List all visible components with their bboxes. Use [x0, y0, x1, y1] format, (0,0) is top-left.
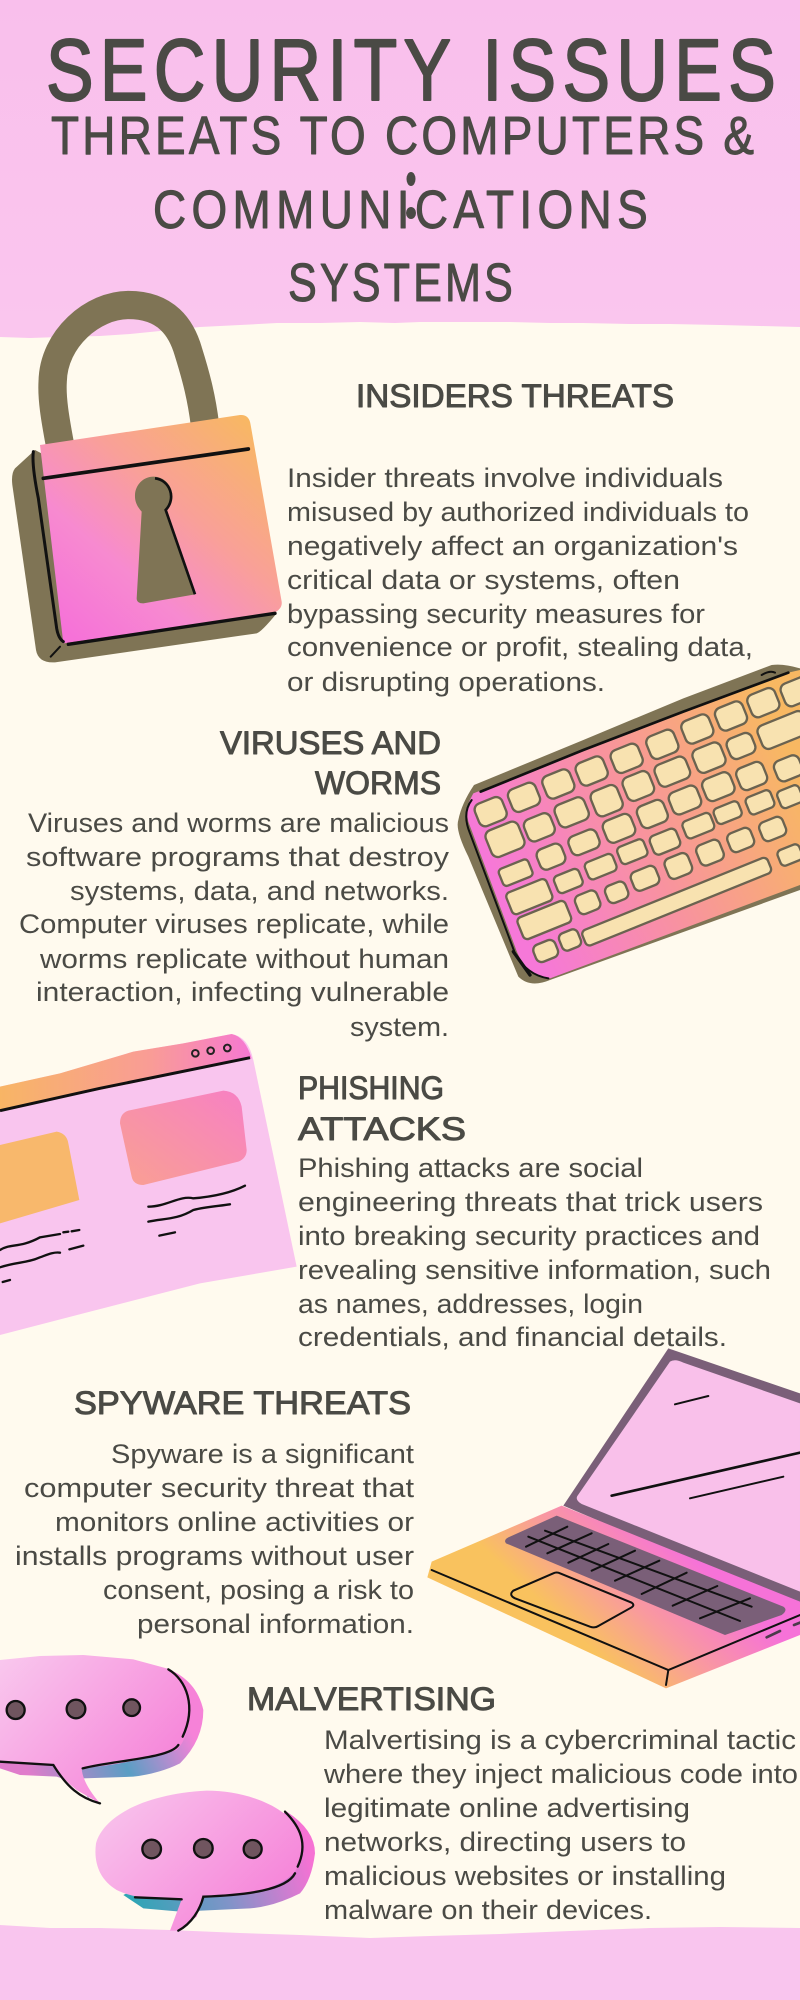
body text: revealing sensitive information, such — [298, 1255, 771, 1285]
body text: negatively affect an organization's — [287, 531, 738, 561]
heading: INSIDERS THREATS — [356, 378, 674, 414]
body text: Phishing attacks are social — [298, 1153, 643, 1183]
body text: Insider threats involve individuals — [287, 463, 723, 493]
body text: convenience or profit, stealing data, — [287, 632, 753, 662]
heading: SPYWARE THREATS — [74, 1385, 411, 1421]
body text: or disrupting operations. — [287, 667, 605, 697]
keyboard back — [458, 665, 800, 983]
section: spyware threats — [15, 1385, 415, 1639]
body text: consent, posing a risk to — [103, 1575, 414, 1605]
subtitle line 3: SYSTEMS — [288, 254, 513, 313]
title bar line — [0, 1058, 250, 1111]
icon: laptop — [427, 1348, 800, 1688]
body text: networks, directing users to — [324, 1827, 686, 1857]
bubble face — [95, 1791, 301, 1931]
text squiggles — [0, 1186, 245, 1282]
body text: installs programs without user — [15, 1541, 414, 1571]
base outline — [432, 1570, 800, 1685]
body text — [298, 1153, 771, 1352]
body text — [287, 463, 753, 697]
padlock back — [12, 450, 277, 662]
body text: computer security threat that — [24, 1473, 415, 1503]
icon: padlock — [12, 305, 282, 662]
padlock shackle — [52, 305, 205, 445]
keyboard outlines — [466, 672, 788, 978]
body text: credentials, and financial details. — [298, 1322, 727, 1352]
bubble face — [0, 1655, 190, 1803]
heading: MALVERTISING — [247, 1681, 496, 1717]
title: security issues: SECURITY ISSUES — [46, 21, 776, 119]
screen glare lines — [612, 1396, 800, 1498]
bubble dots — [142, 1839, 262, 1858]
icon: speech bubble bottom — [95, 1791, 315, 1931]
stray decorative dots — [406, 172, 416, 219]
keys — [473, 675, 800, 964]
body text: interaction, infecting vulnerable — [36, 977, 449, 1007]
body text — [323, 1725, 798, 1925]
bubble outline — [135, 1812, 302, 1931]
heading — [298, 1070, 466, 1147]
laptop screen frame — [563, 1348, 800, 1607]
body text: misused by authorized individuals to — [287, 497, 749, 527]
body text — [19, 808, 450, 1042]
bubble dots — [7, 1699, 140, 1719]
body text: bypassing security measures for — [287, 599, 705, 629]
body text: Malvertising is a cybercriminal tactic — [324, 1725, 796, 1755]
section: phishing attacks — [298, 1070, 771, 1352]
keyhole edge — [155, 478, 195, 594]
body text: worms replicate without human — [39, 944, 449, 974]
window control dots — [192, 1045, 231, 1057]
window body — [0, 1034, 297, 1335]
padlock front — [40, 415, 282, 643]
window title bar — [0, 1034, 252, 1111]
subtitle line 2: COMMUNICATIONS — [153, 180, 648, 240]
body text — [15, 1439, 415, 1639]
heading: ATTACKS — [298, 1111, 466, 1147]
body text: into breaking security practices and — [298, 1221, 760, 1251]
laptop screen — [577, 1360, 800, 1592]
body text: system. — [350, 1012, 449, 1042]
heading: VIRUSES AND — [220, 725, 441, 761]
body text: Spyware is a significant — [111, 1439, 415, 1469]
heading — [220, 725, 441, 801]
icon: browser window — [0, 1034, 297, 1335]
bubble outline — [0, 1669, 189, 1803]
bubble shadow — [0, 1668, 203, 1800]
top pink header band — [0, 0, 800, 338]
body text: Computer viruses replicate, while — [19, 909, 449, 939]
subtitle line 1: THREATS TO COMPUTERS & — [51, 106, 754, 166]
body text: malicious websites or installing — [324, 1861, 726, 1891]
keyboard front — [467, 670, 800, 978]
icon: speech bubble top — [0, 1655, 203, 1803]
body text: systems, data, and networks. — [70, 876, 449, 906]
title block — [46, 21, 776, 313]
heading: WORMS — [315, 765, 441, 801]
heading: PHISHING — [298, 1070, 444, 1106]
icon: keyboard — [458, 665, 800, 983]
body text: software programs that destroy — [26, 842, 450, 872]
side ports — [767, 1623, 800, 1637]
body text: critical data or systems, often — [287, 565, 680, 595]
body text: malware on their devices. — [324, 1895, 652, 1925]
left card — [0, 1132, 79, 1223]
keyhole — [135, 477, 195, 603]
bubble shadow — [123, 1812, 315, 1912]
keyboard deck — [505, 1516, 785, 1635]
body text: engineering threats that trick users — [298, 1187, 763, 1217]
body text: legitimate online advertising — [324, 1793, 690, 1823]
section: insiders threats — [287, 378, 753, 697]
laptop base — [427, 1506, 800, 1688]
body text: where they inject malicious code into — [323, 1759, 798, 1789]
right card — [120, 1091, 247, 1185]
trackpad — [511, 1572, 633, 1627]
section: malvertising — [247, 1681, 798, 1925]
body text: Viruses and worms are malicious — [28, 808, 449, 838]
section: viruses and worms — [19, 725, 450, 1042]
deck key grid — [526, 1527, 752, 1621]
padlock outlines — [33, 449, 275, 657]
body text: monitors online activities or — [55, 1507, 414, 1537]
body text: as names, addresses, login — [298, 1289, 643, 1319]
bottom pink band — [0, 1925, 800, 2000]
body text: personal information. — [137, 1609, 414, 1639]
